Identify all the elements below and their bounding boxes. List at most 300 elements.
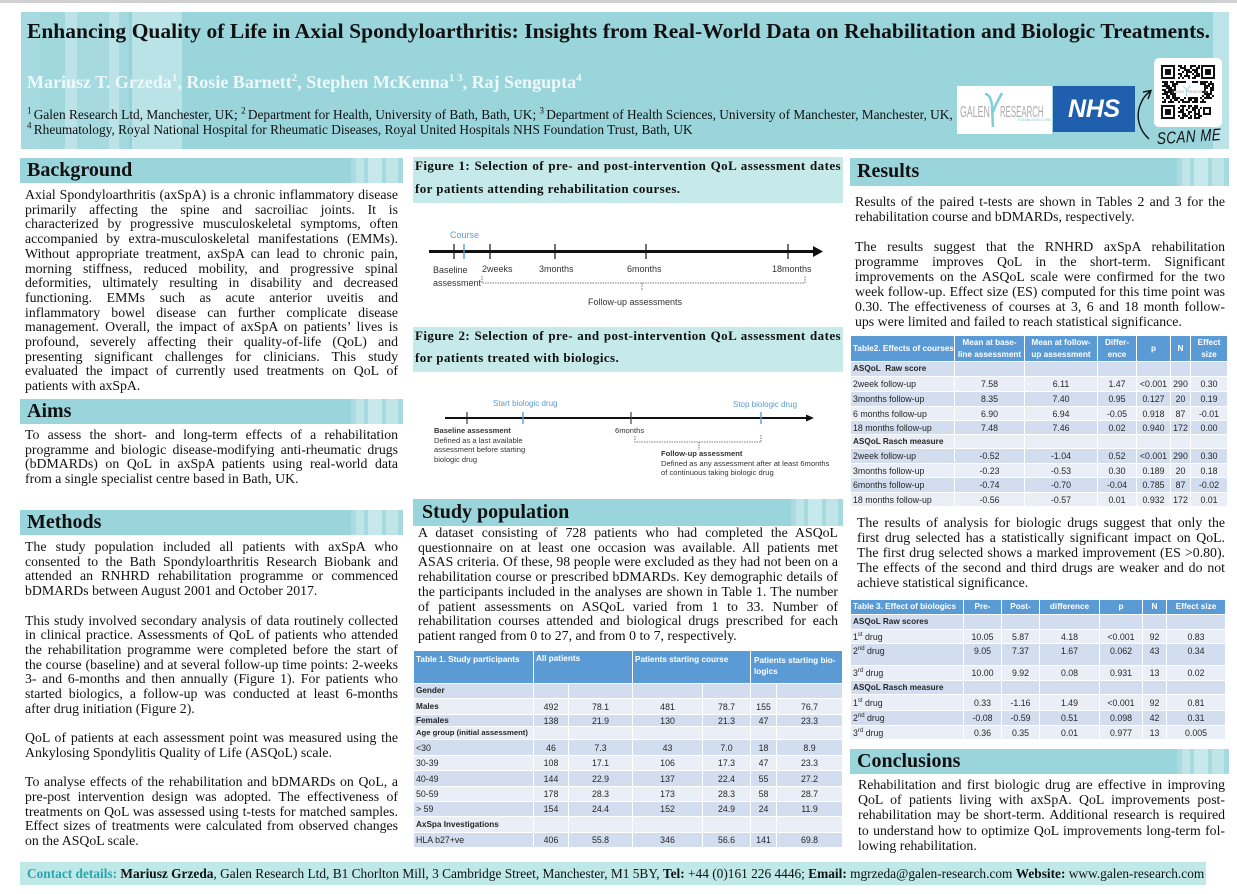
table 2: effects of courses: 0.189 [1142, 466, 1164, 476]
table 2: effects of courses: -0.52 [979, 451, 1000, 461]
table 2: effects of courses: -0.74 [979, 480, 1000, 490]
biologic drugs results text: first drug selected has a statistically significant impact on QoL. [857, 530, 1225, 545]
background text: evaluated the impact of currently used treatments on QoL of [25, 363, 398, 378]
methods text: started biologics, a follow-up was conducted at least 6-months [25, 686, 398, 701]
table 2: effects of courses: -0.01 [1199, 408, 1219, 418]
table 2: effects of courses: 0.01 [1200, 494, 1218, 504]
table 3: effect of biologics: 0.35 [1012, 728, 1029, 738]
heading: results: Results [857, 160, 919, 182]
table 1: study participants: 30-39 [416, 758, 438, 768]
table 1: study participants: > 59 [416, 804, 433, 814]
table 2: effects of courses: -0.56 [979, 494, 1000, 504]
figure 2 caption: for patients treated with biologics. [415, 350, 619, 364]
figure 1 caption [413, 157, 843, 203]
table 1: study participants: 17.3 [718, 758, 735, 768]
table 2: effects of courses: -0.23 [979, 466, 1000, 476]
table 3: effect of biologics: 1.49 [1061, 698, 1078, 708]
table 2: effects of courses: Differ- [1105, 338, 1129, 346]
table 3: effect of biologics: 0.977 [1110, 728, 1132, 738]
table 2: effects of courses: 0.19 [1200, 394, 1218, 404]
background text [25, 187, 398, 393]
table 3: effect of biologics: 0.062 [1110, 646, 1132, 656]
table 2: effects of courses: line assessment [958, 350, 1021, 358]
table 1: study participants: 108 [544, 758, 558, 768]
table 2: effects of courses: Mean at base- [962, 338, 1017, 346]
table 2: effects of courses: 8.35 [981, 394, 998, 404]
table 2: effects of courses: 290 [1173, 451, 1188, 461]
methods text: in clinical practice. Assessments of QoL of patients who attended [25, 627, 398, 642]
logo: Galen Research: GALEN [960, 104, 990, 121]
table 2: effects of courses: 172 [1173, 494, 1188, 504]
table 1: study participants: 7.0 [720, 742, 733, 752]
background text: profound, severely affecting their quality-of-life (QoL) and [25, 334, 398, 349]
table 2: effects of courses: 0.00 [1200, 422, 1218, 432]
table 2: effects of courses: p [1151, 344, 1156, 352]
label: start biologic drug: Start biologic drug [493, 399, 557, 408]
table 2: effects of courses: 0.785 [1142, 480, 1164, 490]
contact details bar: Contact details: Mariusz Grzeda, Galen Research Ltd, B1 Chorlton Mill, 3 Cambridge Street, Manchester, M1 5BY, Tel: +44 (0)161 226 4446; Email: mgrzeda@galen-research.com Website: www.galen-research.com [27, 866, 1204, 881]
biologic drugs results text: The results of analysis for biologic drugs suggest that only the [857, 515, 1225, 530]
contact details bar [20, 862, 1206, 885]
table 2: effects of courses: -1.04 [1051, 451, 1071, 461]
table 2: effects of courses: 6.94 [1052, 408, 1070, 418]
table 1: study participants: 40-49 [416, 774, 438, 784]
table 3: effect of biologics: 3rd drug [853, 728, 883, 738]
methods text: attended an RNHRD rehabilitation programme or commenced [25, 568, 398, 583]
background text: Axial Spondyloarthritis (axSpA) is a chronic inflammatory disease [25, 187, 398, 202]
table 2: effects of courses: Table2. Effects of courses [853, 344, 954, 352]
study population text: rehabilitation course or prescribed bDMARDs. Key demographic details of [418, 569, 838, 584]
table 2: effects of courses: 0.30 [1200, 451, 1218, 461]
QR code: GALEN [1172, 90, 1184, 94]
table 2: effects of courses: 0.918 [1142, 408, 1164, 418]
results text: week follow-up. Effect size (ES) computed for this time point was [855, 284, 1225, 299]
aims text [25, 427, 398, 486]
table 2: effects of courses [851, 336, 1227, 506]
table 3: effect of biologics: <0.001 [1107, 632, 1135, 642]
table 3: effect of biologics: 43 [1150, 646, 1159, 656]
methods text: Effect sizes of treatments were calculated from observed changes [25, 818, 398, 833]
label: 2 weeks: 2weeks [482, 264, 513, 274]
results text: improvements on the ASQoL scale were confirmed for the two [855, 269, 1225, 284]
table 2: effects of courses: ASQoL Rasch measure [853, 436, 943, 446]
table 2: effects of courses: 0.932 [1142, 494, 1164, 504]
label: follow-up assessment definition [661, 449, 830, 477]
table 1: study participants: Patients starting bio- [754, 656, 835, 665]
table 2: effects of courses: -0.70 [1051, 480, 1071, 490]
table 3: effect of biologics: <0.001 [1107, 698, 1135, 708]
table 3: effect of biologics: 92 [1150, 698, 1159, 708]
table 3: effect of biologics: N [1152, 602, 1157, 611]
label: 6 months: 6months [627, 264, 662, 274]
table 1: study participants: 78.7 [718, 702, 735, 712]
table 2: effects of courses: ence [1108, 350, 1126, 358]
label: baseline assessment: assessment [433, 278, 481, 288]
conclusions text: QoL of patients living with axSpA. QoL improvements post- [858, 792, 1225, 807]
background text: accompanied by extra-musculoskeletal manifestations (EMMs). [25, 231, 398, 246]
table 1: study participants: 28.3 [592, 789, 609, 799]
affiliations: 4 Rheumatology, Royal National Hospital for Rheumatic Diseases, Royal United Hospitals NHS Foundation Trust, Bath, UK [27, 121, 693, 137]
table 2: effects of courses: 87 [1176, 480, 1185, 490]
figure 1 caption: for patients attending rehabilitation courses. [415, 180, 680, 196]
biologic drugs results text: The first drug selected shows a marked improvement (ES >0.80). [857, 545, 1225, 560]
methods text: QoL of patients at each assessment point was measured using the [25, 730, 398, 745]
table 1: study participants: 492 [544, 702, 558, 712]
table 3: effect of biologics: 0.36 [974, 728, 991, 738]
table 3: effect of biologics: Post- [1010, 602, 1031, 611]
heading: conclusions: Conclusions [857, 750, 960, 772]
table 1: study participants: AxSpa Investigations [416, 820, 499, 828]
table 2: effects of courses: 3months follow-up [853, 466, 924, 476]
table 1: study participants: All patients [536, 654, 580, 663]
label: baseline assessment definition: Baseline assessment [434, 426, 511, 435]
background text: functioning. EMMs such as acute anterior uveitis and [25, 290, 398, 305]
conclusions text: to understand how to optimize QoL improvements long-term fol- [858, 823, 1225, 838]
table 2: effects of courses: 18 months follow-up [853, 422, 932, 432]
label: baseline assessment definition [434, 426, 525, 464]
study population text: of patient assessments on ASQoL varied from 1 to 33. Number of [418, 599, 838, 614]
QR code [1154, 58, 1222, 127]
affiliations [27, 106, 953, 137]
table 3: effect of biologics: -0.08 [972, 713, 993, 723]
table 1: study participants: 106 [660, 758, 675, 768]
table 3: effect of biologics: Pre- [975, 602, 990, 611]
background text: presenting significant challenges for clinicians. This study [25, 349, 398, 364]
biologic drugs results text: achieve statistical significance. [857, 575, 1028, 590]
heading: background: Background [27, 159, 132, 181]
heading: methods [20, 510, 403, 535]
biologic drugs results text [857, 515, 1225, 590]
table 3: effect of biologics: Table 3. Effect of biologics [853, 602, 956, 611]
label: follow-up assessment definition: of continuous taking biologic drug [661, 468, 774, 477]
table 3: effect of biologics: 13 [1150, 728, 1159, 738]
aims text: To assess the short- and long-term effects of a rehabilitation [25, 427, 398, 442]
table 3: effect of biologics: 1st drug [853, 632, 883, 642]
label: 6 months: 6months [615, 426, 644, 435]
results text: programme improves QoL in the short-term. Significant [855, 254, 1225, 269]
table 2: effects of courses: 7.46 [1052, 422, 1070, 432]
panel: study population [413, 499, 843, 643]
results text: ups were limited and failed to reach statistical significance. [855, 314, 1182, 329]
table 1: study participants: 69.8 [801, 835, 818, 845]
table 1: study participants: 144 [544, 774, 558, 784]
study population text: questionnaire on at least one occasion was available. All patients met [418, 540, 838, 555]
table 3: effect of biologics: 13 [1150, 668, 1159, 678]
table 1: study participants: 23.3 [801, 716, 818, 726]
authors: Mariusz T. Grzeda1, Rosie Barnett2, Stephen McKenna1 3, Raj Sengupta4 [27, 72, 582, 92]
logo: Galen Research: RESEARCH [1000, 104, 1044, 121]
table 2: effects of courses: 0.127 [1142, 394, 1164, 404]
label: stop biologic drug: Stop biologic drug [733, 400, 797, 409]
table 2: effects of courses: size [1201, 350, 1217, 358]
table 2: effects of courses: -0.05 [1107, 408, 1127, 418]
table 1: study participants: 154 [544, 804, 558, 814]
table 3: effect of biologics: 1st drug [853, 698, 883, 708]
heading: conclusions [850, 749, 1229, 774]
methods text: The study population included all patients with axSpA who [25, 539, 398, 554]
methods text: the rehabilitation programme were completed before the start of [25, 642, 398, 657]
timeline axis [429, 244, 823, 291]
table 3: effect of biologics: 0.08 [1061, 668, 1078, 678]
table 1: study participants: 22.4 [718, 774, 735, 784]
icon: arrow to QR code [1137, 90, 1152, 140]
table 1: study participants: 8.9 [803, 742, 816, 752]
table 2: effects of courses: 6months follow-up [853, 480, 924, 490]
scan me label: SCAN ME [1156, 125, 1222, 148]
table 3: effect of biologics: 9.92 [1012, 668, 1029, 678]
table 2: effects of courses: -0.57 [1051, 494, 1071, 504]
table 2: effects of courses: 20 [1176, 394, 1185, 404]
label: baseline assessment definition: biologic drug [434, 454, 477, 464]
methods text: consented to the Bath Spondyloarthritis Research Biobank and [25, 554, 398, 569]
logo: NHS [1053, 86, 1135, 132]
table 2: effects of courses: 6.90 [981, 408, 998, 418]
table 3: effect of biologics: 0.931 [1110, 668, 1132, 678]
table 2: effects of courses: -0.02 [1199, 480, 1219, 490]
label: follow-up assessments: Follow-up assessments [588, 297, 682, 307]
table 2: effects of courses: 2week follow-up [853, 451, 916, 461]
table 2: effects of courses: 0.01 [1108, 494, 1126, 504]
table 3: effect of biologics: 0.83 [1187, 632, 1205, 642]
table 1: study participants: 23.3 [801, 758, 818, 768]
logo: NHS: NHS [1068, 95, 1120, 123]
table 1: study participants: 11.9 [801, 804, 818, 814]
table 1: study participants: 24 [759, 804, 768, 814]
figure 1: rehabilitation timeline [429, 230, 823, 307]
table 3: effect of biologics: 5.87 [1012, 632, 1029, 642]
table 1: study participants: 55 [759, 774, 768, 784]
background text: Without appropriate treatment, axSpA can lead to chronic pain, [25, 246, 398, 261]
table 2: effects of courses: 0.940 [1142, 422, 1164, 432]
results text: 0.30. The effectiveness of courses at 3, 6 and 18 month follow- [855, 299, 1225, 314]
table 2: effects of courses: 0.18 [1200, 466, 1218, 476]
table 1: study participants: 406 [544, 835, 558, 845]
label: baseline assessment definition: assessment before starting [434, 445, 525, 454]
table 2: effects of courses: Effect [1198, 338, 1220, 346]
table 1: study participants [414, 651, 842, 847]
table 3: effect of biologics: 10.05 [971, 632, 994, 642]
table 2: effects of courses: 290 [1173, 379, 1188, 389]
table 3: effect of biologics: 0.01 [1061, 728, 1078, 738]
table 2: effects of courses: 172 [1173, 422, 1188, 432]
panel: results [850, 158, 1229, 329]
results text: Results of the paired t-tests are shown in Tables 2 and 3 for the [855, 194, 1225, 209]
study population text [418, 525, 838, 643]
table 3: effect of biologics: p [1118, 602, 1124, 611]
figure 2 caption: Figure 2: Selection of pre- and post-intervention QoL assessment dates [415, 328, 841, 342]
table 1: study participants: Table 1. Study participants [416, 655, 520, 664]
decorative stripes [21, 12, 182, 149]
table 1: study participants: Age group (initial assessment) [416, 728, 528, 737]
methods text: To analyse effects of the rehabilitation and bDMARDs on QoL, a [25, 774, 398, 789]
heading: results [850, 158, 1229, 186]
table 1: study participants: 137 [660, 774, 675, 784]
conclusions text: Rehabilitation and first biologic drug are effective in improving [858, 777, 1225, 792]
label: baseline assessment: Baseline [433, 265, 468, 275]
table 2: effects of courses: 87 [1176, 408, 1185, 418]
methods text: on the ASQoL scale. [25, 833, 139, 848]
table 1: study participants: 27.2 [801, 774, 818, 784]
table 1: study participants: 7.3 [594, 742, 607, 752]
methods text: after drug initiation (Figure 2). [25, 701, 195, 716]
table 1: study participants: 55.8 [592, 835, 609, 845]
figure 2: biologics timeline [434, 399, 830, 477]
table 1: study participants: 78.1 [592, 702, 609, 712]
table 3: effect of biologics: 9.05 [974, 646, 991, 656]
table 1: study participants: Males [416, 702, 439, 710]
table 1: study participants: 46 [546, 742, 556, 752]
table 3: effect of biologics: 0.02 [1187, 668, 1205, 678]
table 1: study participants: 138 [544, 716, 558, 726]
table 3: effect of biologics: ASQoL Raw scores [853, 617, 928, 626]
table 3: effect of biologics [851, 600, 1225, 739]
biologic drugs results text: The effects of the second and third drugs are weaker and do not [857, 560, 1225, 575]
study population text: rehabilitation courses attended and biological drugs prescribed for each [418, 613, 838, 628]
methods text: Ankylosing Spondylitis Quality of Life (ASQoL) scale. [25, 745, 332, 760]
methods text: 3- and 6-months and then annually (Figure 1). For patients who [25, 671, 398, 686]
table 1: study participants: Gender [416, 686, 445, 695]
table 3: effect of biologics: 4.18 [1061, 632, 1078, 642]
table 3: effect of biologics: 0.33 [974, 698, 991, 708]
table 2: effects of courses: <0.001 [1140, 379, 1167, 389]
logo: Galen Research: ESTABLISHED 1988 [1018, 118, 1051, 122]
table 3: effect of biologics: 2nd drug [853, 713, 885, 723]
table 3: effect of biologics: -1.16 [1010, 698, 1031, 708]
panel: conclusions [850, 749, 1229, 853]
aims text: programme and biologic disease-modifying anti-rheumatic drugs [25, 442, 398, 457]
table 2: effects of courses: 6 months follow-up [853, 408, 927, 418]
table 2: effects of courses: 2week follow-up [853, 379, 916, 389]
table 1: study participants: Patients starting course [635, 655, 728, 664]
table 3: effect of biologics: 7.37 [1012, 646, 1029, 656]
table 1: study participants: 28.3 [718, 789, 735, 799]
figure 2 caption [413, 327, 843, 372]
table 3: effect of biologics: 1.67 [1061, 646, 1078, 656]
background text: management. Overall, the impact of axSpA on patients’ lives is [25, 319, 398, 334]
table 1: study participants: 130 [660, 716, 675, 726]
aims text: from a single specialist centre based in Bath, UK. [25, 471, 299, 486]
QR code: RESEARCH [1188, 90, 1208, 94]
conclusions text [858, 777, 1225, 853]
methods text: the course (baseline) and at several follow-up time points: 2-weeks [25, 657, 398, 672]
table 1: study participants: 18 [759, 742, 768, 752]
table 1: study participants: 141 [756, 835, 771, 845]
table 1: study participants: 152 [660, 804, 675, 814]
table 1: study participants: 346 [660, 835, 675, 845]
table 2: effects of courses: 7.58 [981, 379, 998, 389]
table 3: effect of biologics: ASQoL Rasch measure [853, 682, 943, 692]
table 2: effects of courses: Mean at follow- [1031, 338, 1091, 346]
table 3: effect of biologics: 10.00 [971, 668, 994, 678]
heading: aims [20, 399, 403, 424]
affiliations: 1 Galen Research Ltd, Manchester, UK; 2 Department for Health, University of Bath, Bath, UK; 3 Department of Health Sciences, University of Manchester, Manchester, UK, [27, 106, 953, 122]
methods text: pre-post intervention design was adopted. The effectiveness of [25, 789, 398, 804]
label: baseline assessment [433, 265, 481, 288]
table 1: study participants: 155 [756, 702, 771, 712]
heading: background [20, 158, 403, 183]
results text [855, 194, 1225, 329]
study population text: patient ranged from 0 to 27, and from 0 to 7, respectively. [418, 628, 737, 643]
table 2: effects of courses: <0.001 [1140, 451, 1167, 461]
table 1: study participants: Females [416, 716, 449, 724]
table 3: effect of biologics: 92 [1150, 632, 1159, 642]
table 3: effect of biologics: difference [1050, 602, 1089, 611]
table 1: study participants: logics [754, 667, 778, 676]
table 2: effects of courses: 7.40 [1052, 394, 1070, 404]
results text: The results suggest that the RNHRD axSpA rehabilitation [855, 239, 1225, 254]
timeline axis [445, 412, 814, 450]
table 1: study participants: 28.7 [801, 789, 818, 799]
label: 18 months: 18months [772, 264, 812, 274]
table 3: effect of biologics: -0.59 [1010, 713, 1031, 723]
study population text: A dataset consisting of 728 patients who had completed the ASQoL [418, 525, 838, 540]
table 2: effects of courses: 0.02 [1108, 422, 1126, 432]
results text: rehabilitation course and bDMARDs, respectively. [855, 209, 1135, 224]
table 1: study participants: 76.7 [801, 702, 818, 712]
heading: aims: Aims [27, 400, 71, 422]
table 3: effect of biologics: 0.31 [1187, 713, 1205, 723]
table 3: effect of biologics: 0.098 [1110, 713, 1132, 723]
methods text: This study involved secondary analysis of data routinely collected [25, 612, 398, 628]
study population text: ASAS criteria. Of these, 98 people were excluded as they had not been on a [418, 554, 838, 569]
table 2: effects of courses: 6.11 [1053, 379, 1069, 389]
background text: inflammatory bowel disease can further complicate disease [25, 305, 398, 320]
table 2: effects of courses: 0.95 [1108, 394, 1126, 404]
label: follow-up assessment definition: Follow-up assessment [661, 449, 742, 458]
table 1: study participants: HLA b27+ve [416, 835, 464, 845]
logo: Galen Research [957, 86, 1052, 134]
background text: deformities, ultimately resulting in disability and decreased [25, 275, 398, 290]
table 2: effects of courses: ASQoL Raw score [853, 364, 926, 373]
conclusions text: rehabilitation may be short-term. Additional research is required [858, 807, 1225, 822]
table 3: effect of biologics: 0.81 [1187, 698, 1205, 708]
panel: methods [20, 510, 403, 848]
table 1: study participants: 24.9 [718, 804, 735, 814]
conclusions text: lowing rehabilitation. [858, 838, 977, 853]
table 3: effect of biologics: 42 [1150, 713, 1159, 723]
table 2: effects of courses: 7.48 [981, 422, 998, 432]
table 1: study participants: 47 [759, 758, 768, 768]
table 1: study participants: 58 [759, 789, 768, 799]
label: course: Course [450, 230, 479, 240]
study population text: the participants included in the analyses are shown in Table 1. The number [418, 584, 838, 599]
table 2: effects of courses: 20 [1176, 466, 1185, 476]
table 1: study participants: 50-59 [416, 789, 438, 799]
label: 3 months: 3months [539, 264, 574, 274]
table 2: effects of courses: -0.04 [1107, 480, 1127, 490]
background text: primarily affecting the spine and sacroiliac joints. It is [25, 202, 398, 217]
methods text: bDMARDs between August 2001 and October 2017. [25, 583, 317, 598]
table 2: effects of courses: N [1178, 344, 1183, 352]
methods text [25, 539, 398, 848]
table 3: effect of biologics: 0.005 [1185, 728, 1207, 738]
header banner [21, 12, 1229, 149]
title: Enhancing Quality of Life in Axial Spondyloarthritis: Insights from Real-World Data on Rehabilitation and Biologic Treatments. [27, 19, 1210, 43]
background text: characterized by progressive musculoskeletal symptoms, often [25, 216, 398, 231]
table 1: study participants: 47 [759, 716, 768, 726]
table 2: effects of courses: 0.30 [1200, 379, 1218, 389]
label: follow-up assessment definition: Defined as any assessment after at least 6months [661, 458, 829, 468]
background text: patients with axSpA. [25, 378, 140, 393]
background text: morning stiffness, reduced mobility, and progressive spinal [25, 261, 398, 276]
table 2: effects of courses: 18 months follow-up [853, 494, 932, 504]
table 2: effects of courses: up assessment [1031, 350, 1091, 358]
panel: background [20, 158, 403, 393]
table 2: effects of courses: -0.53 [1051, 466, 1071, 476]
table 1: study participants: 43 [663, 742, 672, 752]
table 1: study participants: 21.3 [718, 716, 735, 726]
methods text: treatments on QoL was assessed using t-tests for matched samples. [25, 804, 398, 819]
